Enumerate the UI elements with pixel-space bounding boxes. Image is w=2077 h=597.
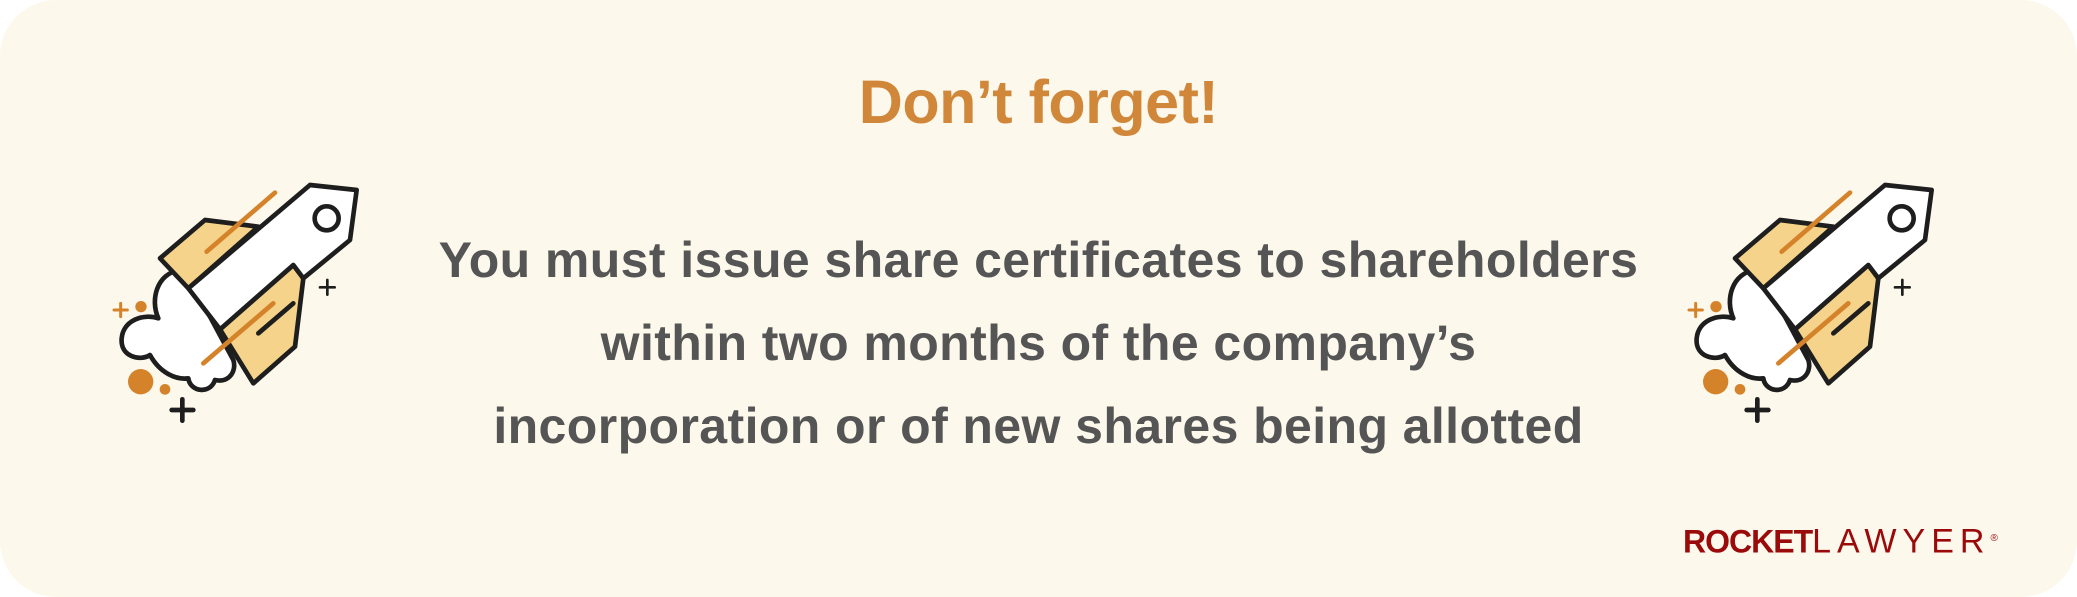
title: Don’t forget! <box>859 68 1218 136</box>
text block: main message: incorporation or of new shares being allotted <box>493 398 1584 454</box>
text block: main message: You must issue share certificates to shareholders <box>439 232 1638 288</box>
logo: ROCKETLAWYER® <box>1683 523 1998 561</box>
text block: main message: within two months of the company’s <box>601 315 1476 371</box>
text block: main message <box>439 232 1638 454</box>
icon: rocket left <box>112 182 359 423</box>
icon: rocket right <box>1688 182 1934 423</box>
